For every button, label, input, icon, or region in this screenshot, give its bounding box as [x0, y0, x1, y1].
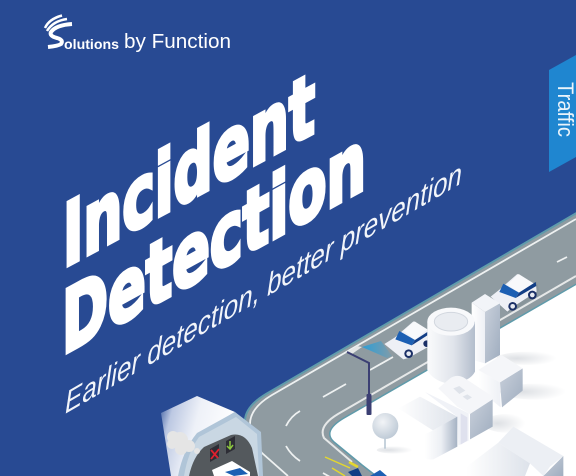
low complex — [398, 376, 493, 460]
car in tunnel — [212, 461, 250, 476]
headlight beams — [325, 457, 358, 476]
tunnel portal — [178, 412, 263, 476]
street light beam — [347, 341, 392, 358]
road inner edge line — [323, 276, 576, 462]
cube block — [478, 355, 523, 407]
logo descriptor: by Function — [124, 31, 231, 53]
tunnel — [161, 396, 263, 476]
car 1 — [384, 321, 430, 359]
lamp post — [347, 352, 372, 415]
green arrow glyph — [227, 441, 233, 449]
oncoming car with headlights — [325, 457, 387, 476]
title line 2: Detection — [62, 108, 366, 376]
logo: Solutions by Function — [45, 16, 231, 53]
portal inner ring — [184, 417, 259, 476]
red cross — [211, 449, 219, 459]
tall tower — [472, 294, 500, 363]
logo wordmark: olutions — [64, 36, 119, 52]
car roof — [348, 468, 362, 476]
tunnel body — [161, 396, 235, 476]
car window — [370, 470, 387, 476]
tab: Traffic — [549, 55, 576, 172]
tagline: Earlier detection, better prevention — [65, 156, 462, 421]
sign: green arrow — [226, 436, 235, 454]
lamp base — [366, 394, 372, 415]
sign: red X — [210, 444, 219, 462]
smoke — [167, 431, 200, 455]
tree — [372, 413, 398, 449]
road — [245, 211, 576, 476]
car 2 — [491, 274, 539, 313]
building shadows — [377, 352, 573, 454]
tunnel opening — [189, 435, 258, 476]
road highlight — [347, 346, 362, 354]
title: Incident Detection — [62, 53, 366, 376]
buildings and cars — [372, 274, 573, 476]
icon: swoosh S — [45, 16, 72, 47]
city block ground — [330, 282, 576, 476]
road outer edge line — [250, 219, 576, 476]
road lane dashes — [286, 257, 567, 476]
lower building — [467, 427, 563, 476]
cylinder tank — [427, 308, 475, 384]
